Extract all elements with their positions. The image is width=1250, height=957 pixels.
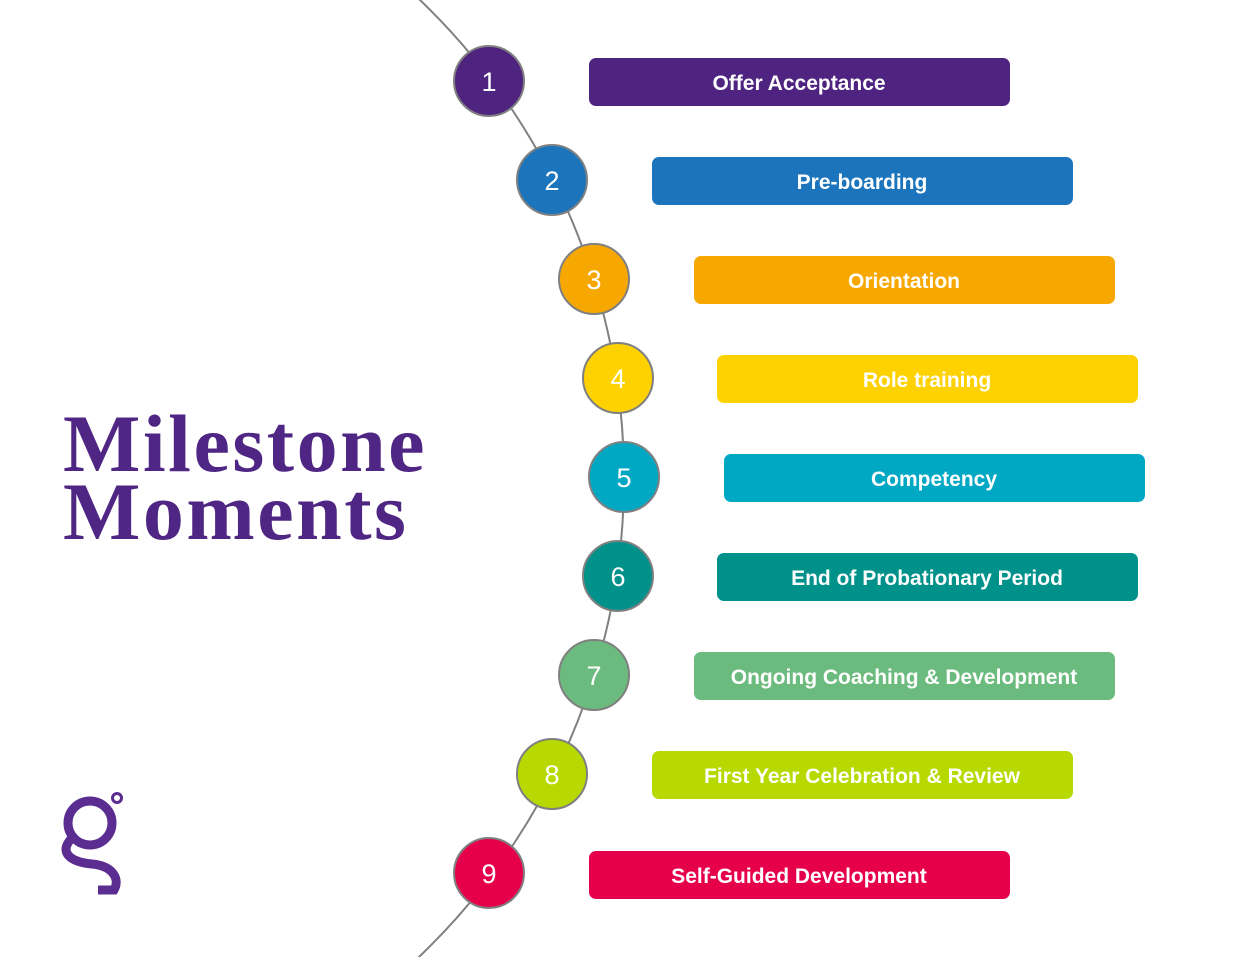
milestone 2: Pre-boarding: [797, 171, 927, 194]
title: Moments: [63, 466, 408, 557]
milestone 5: 5: [616, 463, 632, 493]
milestone 7: 7: [586, 661, 602, 691]
milestone 2: 2: [544, 166, 560, 196]
milestone 7: Ongoing Coaching & Development: [731, 666, 1077, 689]
milestone 3: [559, 244, 1115, 314]
milestone 5: [589, 442, 1145, 512]
milestone 9: Self-Guided Development: [671, 865, 927, 888]
milestone 6: End of Probationary Period: [791, 567, 1063, 590]
milestone 3: Orientation: [848, 270, 960, 293]
milestone 4: Role training: [863, 369, 991, 392]
title: Milestone: [63, 398, 427, 489]
milestone 9: [454, 838, 1010, 908]
milestone 5: Competency: [871, 468, 997, 491]
milestone 8: First Year Celebration & Review: [704, 765, 1021, 788]
milestone 7: [559, 640, 1115, 710]
milestone 6: [583, 541, 1138, 611]
milestone 3: 3: [586, 265, 602, 295]
arc line: [0, 0, 624, 957]
milestone 1: 1: [481, 67, 497, 97]
milestone 8: 8: [544, 760, 560, 790]
milestone 9: 9: [481, 859, 497, 889]
milestone 1: [454, 46, 1010, 116]
logo: [66, 794, 122, 890]
milestone 1: Offer Acceptance: [712, 72, 886, 95]
milestone 2: [517, 145, 1073, 215]
milestone 6: 6: [610, 562, 626, 592]
milestone 4: [583, 343, 1138, 413]
milestone 8: [517, 739, 1073, 809]
title: [63, 398, 427, 557]
milestone 4: 4: [610, 364, 626, 394]
